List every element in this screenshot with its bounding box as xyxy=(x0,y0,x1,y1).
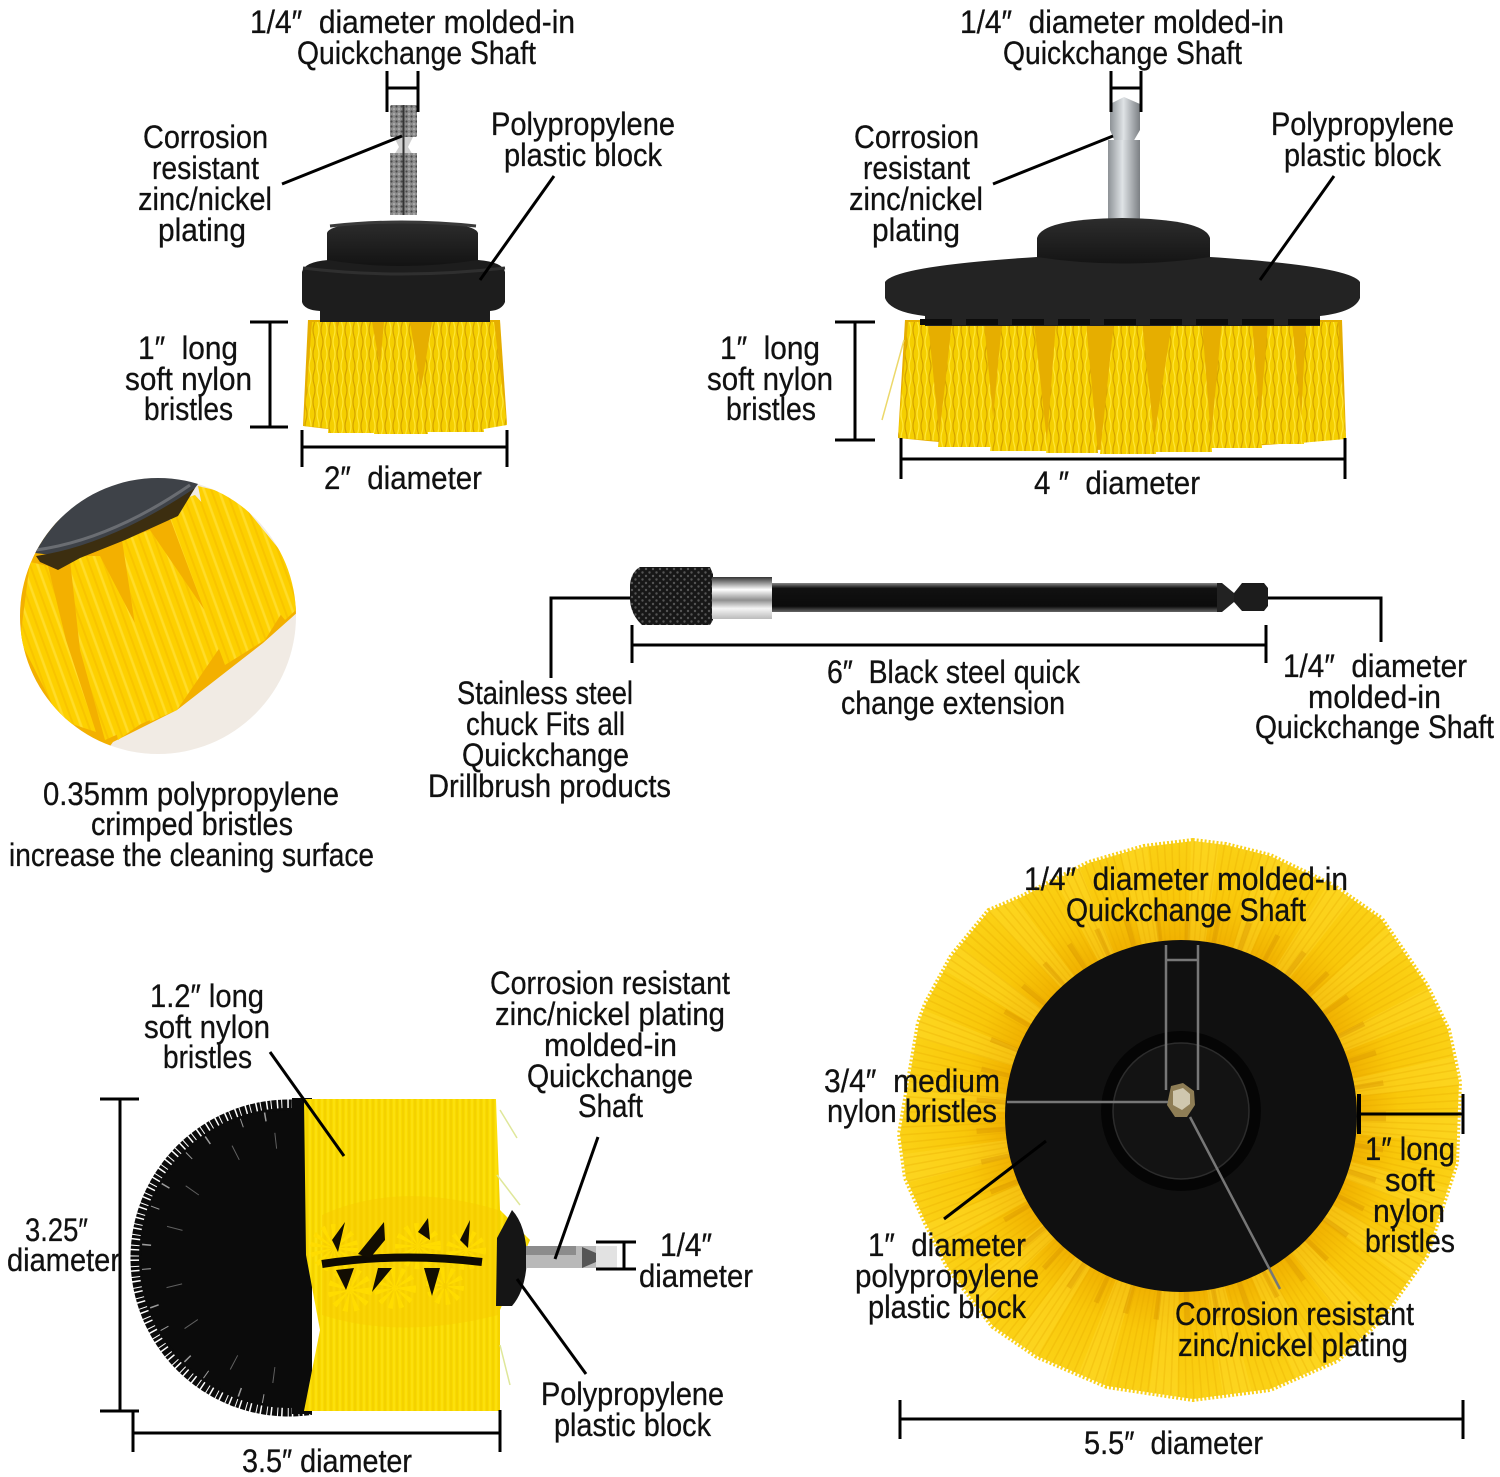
label: brush 1 shaft xyxy=(250,4,575,71)
brush: 4 inch flat brush xyxy=(882,97,1360,454)
label: brush 2 bristles: bristles xyxy=(726,391,816,427)
label: ball shaft: 1/4″ xyxy=(660,1227,712,1263)
ball knotted core xyxy=(322,1218,482,1299)
label: ball height: diameter xyxy=(7,1242,120,1278)
extension bar xyxy=(630,567,1268,625)
label: large brush shaft: 1/4″ diameter molded-in xyxy=(1024,861,1348,897)
label: medium bristles: 3/4″ medium xyxy=(824,1063,1000,1099)
label: crimped bristles: 0.35mm polypropylene xyxy=(43,776,339,812)
label: ball block xyxy=(541,1376,724,1443)
label: ball bristles xyxy=(144,978,270,1075)
label: extension shaft: 1/4″ diameter xyxy=(1283,648,1467,684)
label: extension shaft xyxy=(1255,648,1494,745)
brush 2 bristles xyxy=(882,320,1346,454)
label: ball shaft xyxy=(639,1227,753,1294)
label: long bristles: 1″ long xyxy=(1365,1131,1455,1167)
label: ball height xyxy=(7,1212,120,1278)
label: ball bristles: bristles xyxy=(163,1039,252,1075)
label: brush 2 shaft: Quickchange Shaft xyxy=(1003,35,1242,71)
label: stainless chuck: Stainless steel xyxy=(457,675,633,711)
label: extension length: change extension xyxy=(841,685,1065,721)
label: brush 2 diameter: 4 ″ diameter xyxy=(1034,465,1200,501)
label: brush 1 bristles: soft nylon xyxy=(125,361,252,397)
label: brush 1 plating: Corrosion xyxy=(143,119,268,155)
label: medium bristles xyxy=(824,1063,1000,1129)
brush 2 block xyxy=(885,218,1360,326)
hex bolt xyxy=(1167,1083,1195,1117)
label: brush 1 block: plastic block xyxy=(504,137,663,173)
label: large brush diameter: 5.5″ diameter xyxy=(1084,1425,1263,1461)
label: crimped bristles: crimped bristles xyxy=(91,806,293,842)
extension rod xyxy=(772,583,1217,612)
label: large brush block: polypropylene xyxy=(855,1258,1039,1294)
label: brush 2 plating: Corrosion xyxy=(854,119,979,155)
label: large brush shaft xyxy=(1024,861,1348,928)
label: large brush plating: Corrosion resistant xyxy=(1175,1296,1414,1332)
label: ball plating: molded-in xyxy=(544,1027,677,1063)
label: brush 2 plating: zinc/nickel xyxy=(849,181,983,217)
brush 1 block xyxy=(302,221,505,322)
label: brush 1 bristles: 1″ long xyxy=(138,330,238,366)
black bristles xyxy=(130,1098,312,1416)
label: brush 1 shaft: Quickchange Shaft xyxy=(297,35,536,71)
label: ball plating xyxy=(490,965,730,1124)
label: ball block: Polypropylene xyxy=(541,1376,724,1412)
label: brush 1 plating: plating xyxy=(158,212,246,248)
ball brush xyxy=(136,1098,617,1414)
label: long bristles: nylon xyxy=(1373,1193,1445,1229)
yellow bristles xyxy=(304,1099,530,1411)
label: brush 1 plating: zinc/nickel xyxy=(138,181,272,217)
extension chuck xyxy=(630,567,713,625)
ball hub and shaft xyxy=(496,1210,527,1306)
brush 1 shaft xyxy=(390,105,417,215)
label: brush 1 block: Polypropylene xyxy=(491,106,675,142)
label: brush 2 bristles xyxy=(707,330,833,427)
label: medium bristles: nylon bristles xyxy=(827,1093,997,1129)
label: large brush block: plastic block xyxy=(868,1289,1027,1325)
label: large brush plating xyxy=(1175,1296,1414,1363)
brush 1 bristles xyxy=(303,320,507,434)
label: ball plating: zinc/nickel plating xyxy=(495,996,725,1032)
brush 2 shaft xyxy=(1108,97,1140,222)
label: brush 1 shaft: 1/4″ diameter molded-in xyxy=(250,4,575,40)
label: stainless chuck: chuck Fits all xyxy=(466,706,625,742)
label: brush 2 plating: plating xyxy=(872,212,960,248)
yellow bristle ring xyxy=(900,841,1459,1399)
label: extension shaft: molded-in xyxy=(1308,679,1441,715)
label: brush 2 plating xyxy=(849,119,983,248)
label: stainless chuck: Drillbrush products xyxy=(428,768,671,804)
label: large brush shaft: Quickchange Shaft xyxy=(1066,892,1306,928)
label: long bristles: bristles xyxy=(1365,1223,1455,1259)
label: long bristles xyxy=(1365,1131,1455,1259)
label: brush 2 plating: resistant xyxy=(863,150,970,186)
label: stainless chuck: Quickchange xyxy=(462,737,629,773)
label: brush 1 bristles xyxy=(125,330,252,427)
label: large brush plating: zinc/nickel plating xyxy=(1178,1327,1408,1363)
label: ball plating: Quickchange xyxy=(527,1058,693,1094)
label: brush 2 block: Polypropylene xyxy=(1271,106,1454,142)
detail circle: crimped bristles xyxy=(20,472,300,760)
label: ball shaft: diameter xyxy=(639,1258,753,1294)
brush: 2 inch flat brush xyxy=(302,105,507,434)
label: extension length xyxy=(827,654,1081,721)
label: large brush block: 1″ diameter xyxy=(868,1227,1026,1263)
label: brush 2 shaft xyxy=(960,4,1284,71)
label: ball height: 3.25″ xyxy=(25,1212,88,1248)
label: brush 1 block xyxy=(491,106,675,173)
label: ball plating: Shaft xyxy=(578,1088,643,1124)
label: stainless chuck xyxy=(428,675,671,804)
large brush face xyxy=(900,841,1459,1399)
label: brush 2 shaft: 1/4″ diameter molded-in xyxy=(960,4,1284,40)
label: brush 2 block: plastic block xyxy=(1284,137,1442,173)
label: brush 2 block xyxy=(1271,106,1454,173)
label: ball bristles: 1.2″ long xyxy=(150,978,264,1014)
label: ball block: plastic block xyxy=(554,1407,712,1443)
label: crimped bristles xyxy=(9,776,374,873)
label: ball plating: Corrosion resistant xyxy=(490,965,730,1001)
label: large brush block xyxy=(855,1227,1039,1325)
label: brush 1 plating xyxy=(138,119,272,248)
label: brush 1 plating: resistant xyxy=(152,150,259,186)
label: extension length: 6″ Black steel quick xyxy=(827,654,1081,690)
label: crimped bristles: increase the cleaning surface xyxy=(9,837,374,873)
label: brush 1 diameter: 2″ diameter xyxy=(324,460,482,496)
label: long bristles: soft xyxy=(1385,1162,1435,1198)
label: brush 1 bristles: bristles xyxy=(144,391,233,427)
label: brush 2 bristles: soft nylon xyxy=(707,361,833,397)
black backing disk xyxy=(1005,940,1357,1292)
label: ball bristles: soft nylon xyxy=(144,1009,270,1045)
label: brush 2 bristles: 1″ long xyxy=(720,330,820,366)
